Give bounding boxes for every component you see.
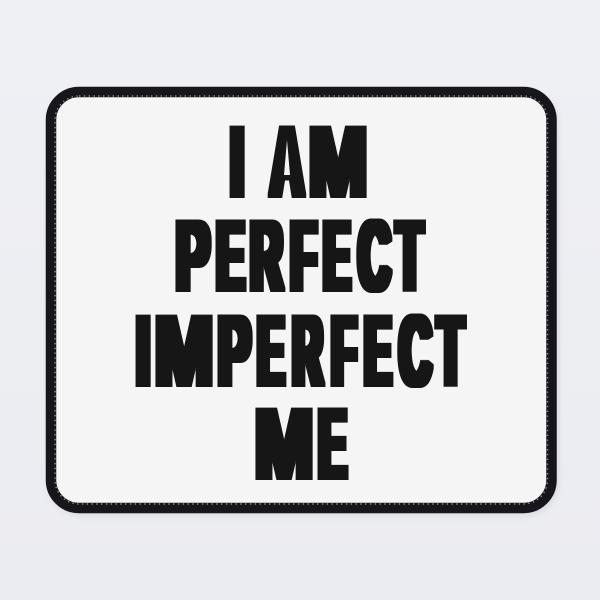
line: I AM: A (270, 106, 304, 217)
line: IMPERFECT: I (136, 295, 150, 406)
line: I AM: I (230, 106, 244, 217)
line: IMPERFECT: R (293, 295, 322, 406)
product mockup: mouse pad: T (438, 295, 463, 406)
slogan text (136, 106, 463, 499)
line: PERFECT: E (217, 200, 244, 311)
line: PERFECT: F (291, 200, 316, 311)
line: IMPERFECT: E (365, 295, 391, 406)
line: I AM: M (309, 106, 367, 217)
pad with stitched border (51, 92, 552, 508)
line: IMPERFECT: E (258, 295, 284, 406)
line: IMPERFECT: P (218, 295, 250, 406)
line: PERFECT: E (324, 200, 350, 311)
letter A counter (284, 140, 290, 175)
line: PERFECT: C (358, 200, 390, 311)
line: ME: M (255, 388, 313, 499)
line: IMPERFECT: C (400, 295, 431, 406)
line: PERFECT: R (250, 200, 282, 311)
slogan text: T (397, 200, 422, 311)
line: IMPERFECT: M (155, 295, 213, 406)
line: IMPERFECT: F (332, 295, 356, 406)
line: PERFECT: P (176, 200, 209, 311)
slogan text: E (319, 388, 346, 499)
pad shadow (47, 92, 559, 516)
